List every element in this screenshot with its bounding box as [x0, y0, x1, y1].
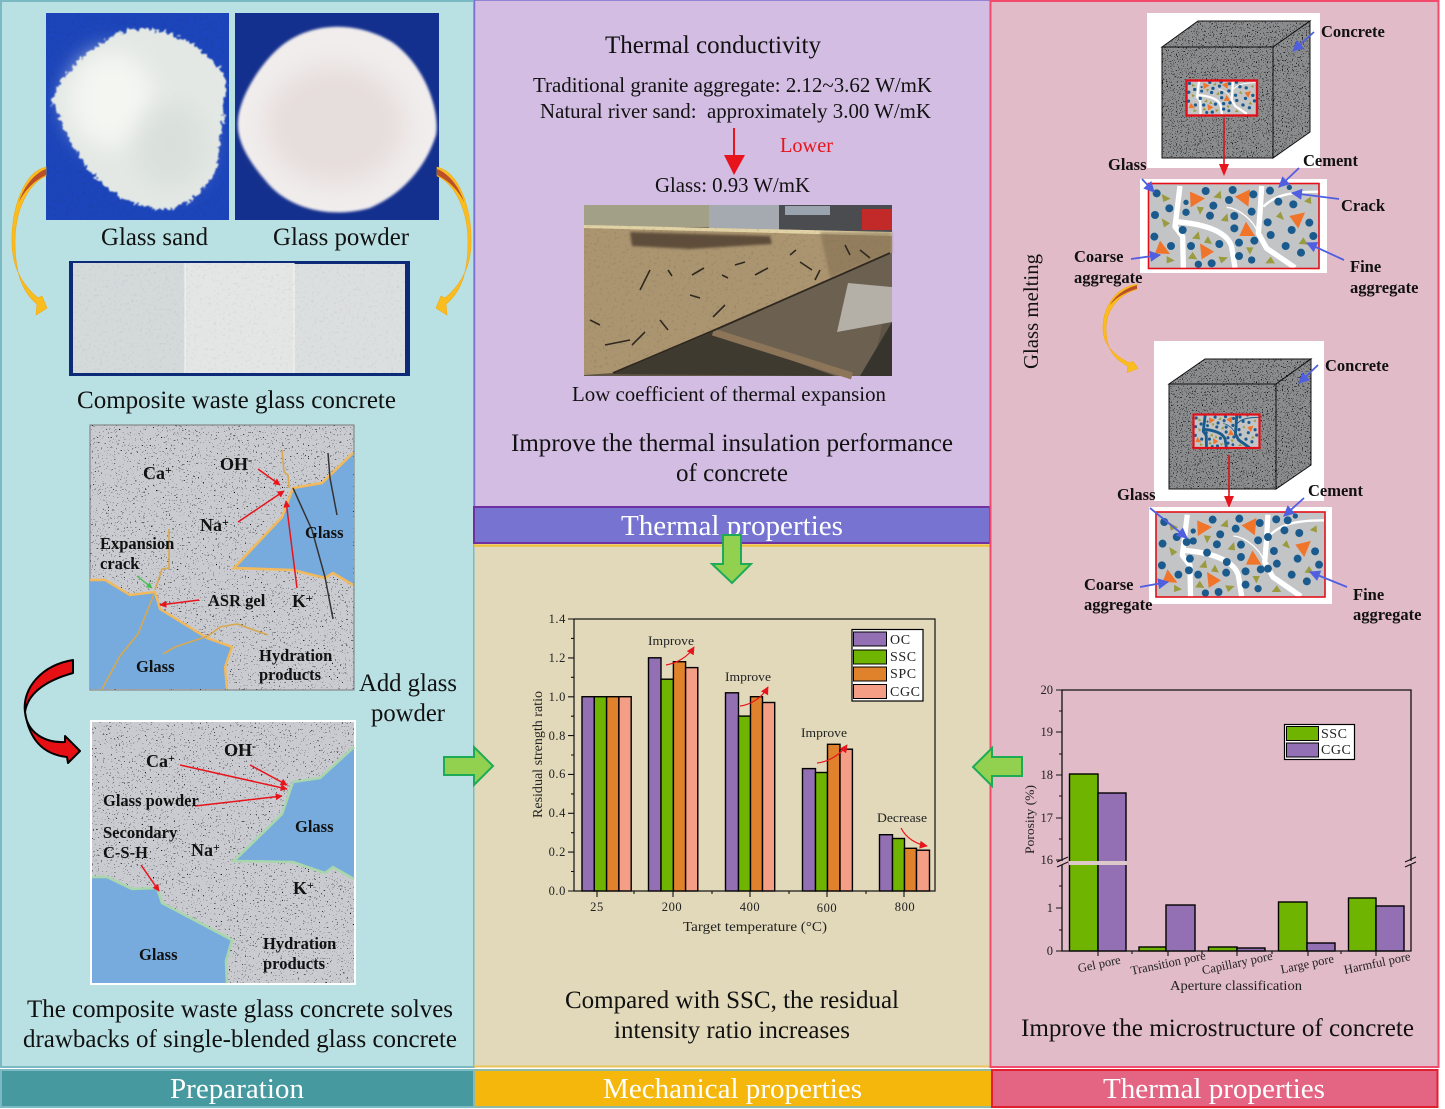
- label: glass sand: Glass sand: [101, 224, 208, 251]
- text: conductivity values: [533, 73, 932, 123]
- bars 600 C: [802, 744, 852, 891]
- arrow: red curved: [25, 660, 80, 763]
- annotations: Improve: [648, 634, 694, 648]
- category labels: Transition pore: [1129, 948, 1207, 978]
- y axis ticks: 1.0: [549, 690, 566, 704]
- diagram labels: OH: [224, 740, 252, 760]
- diagram labels: -: [252, 739, 256, 753]
- caption: low coefficient: Low coefficient of thermal expansion: [572, 382, 886, 406]
- diagram: detail before melting: [1140, 179, 1327, 273]
- text: glass conductivity: Glass: 0.93 W/mK: [655, 173, 810, 197]
- legend: SPC: [890, 667, 917, 682]
- diagram: concrete cube before melting: [1147, 13, 1320, 168]
- chart: residual strength ratio: [531, 612, 935, 935]
- y axis ticks: 17: [1040, 811, 1053, 825]
- footer: preparation: Preparation: [170, 1073, 305, 1105]
- diagram labels: +: [307, 878, 314, 892]
- labels: detail after melting: Glass: [1117, 485, 1156, 504]
- footer: mechanical properties: [474, 1070, 992, 1107]
- label: composite waste glass concrete: Composite waste glass concrete: [77, 387, 396, 414]
- diagram labels: K: [293, 878, 307, 898]
- diagram labels: Glass: [295, 817, 334, 836]
- category labels: [1076, 948, 1412, 978]
- diagram labels: OH: [220, 454, 248, 474]
- labels: detail before melting: Concrete: [1321, 22, 1385, 41]
- bars 800 C: [880, 835, 930, 891]
- conclusion: microstructure: Improve the microstructure of concrete: [1021, 1015, 1414, 1042]
- annotations: [648, 634, 927, 846]
- annotations: Decrease: [877, 811, 927, 825]
- ion arrows: [160, 469, 297, 605]
- text: conductivity values: Traditional granite aggregate: 2.12~3.62 W/mK: [533, 73, 932, 97]
- diagram labels: +: [165, 463, 172, 477]
- category labels: Harmful pore: [1343, 949, 1412, 977]
- x axis ticks: 800: [895, 900, 915, 914]
- diagram labels: +: [222, 515, 229, 529]
- conclusion: thermal insulation: Improve the thermal insulation performance: [511, 430, 953, 457]
- arrow: preparation to mechanical: [444, 747, 493, 785]
- diagram labels: Glass: [305, 523, 344, 542]
- diagram labels: Ca: [143, 463, 165, 483]
- footer: mechanical properties: Mechanical properties: [603, 1073, 862, 1105]
- diagram labels: [100, 453, 344, 684]
- photo: glass powder: [235, 13, 439, 220]
- legend: CGC: [1321, 743, 1351, 758]
- diagram labels: Glass: [139, 945, 178, 964]
- crack pointer: [137, 576, 152, 588]
- labels: detail before melting: Cement: [1303, 151, 1358, 170]
- diagram labels: [103, 739, 336, 973]
- conclusion: mechanical: Compared with SSC, the residual: [565, 987, 899, 1014]
- labels: detail after melting: Coarse: [1084, 575, 1133, 594]
- arrow: microstructure to mechanical: [973, 748, 1022, 786]
- arrow: thermal down to mechanical: [712, 535, 751, 583]
- diagram labels: products: [259, 665, 322, 684]
- diagram labels: +: [306, 591, 313, 605]
- diagram labels: Ca: [146, 751, 168, 771]
- legend: [852, 630, 923, 701]
- legend: CGC: [890, 685, 921, 700]
- diagram labels: Na: [191, 840, 213, 860]
- label: glass powder: Glass powder: [273, 224, 410, 251]
- bars: large pore: [1278, 902, 1335, 951]
- conclusion: mechanical: [565, 987, 899, 1044]
- label: add glass powder: [359, 670, 457, 727]
- category labels: Gel pore: [1076, 953, 1122, 975]
- heading: thermal conductivity: Thermal conductivity: [605, 32, 821, 59]
- x axis ticks: 200: [662, 900, 682, 914]
- chart: porosity by aperture class: [1022, 683, 1416, 994]
- conclusion: mechanical: intensity ratio increases: [614, 1017, 850, 1044]
- y axis ticks: 0: [1047, 944, 1053, 958]
- labels: detail before melting: Coarse: [1074, 247, 1123, 266]
- diagram labels: +: [213, 840, 220, 854]
- labels: detail before melting: [1074, 22, 1418, 297]
- label: add glass powder: Add glass: [359, 670, 457, 697]
- diagram: detail after melting: [1149, 507, 1332, 604]
- labels: detail after melting: Concrete: [1325, 356, 1389, 375]
- label: add glass powder: powder: [371, 700, 446, 727]
- diagram labels: C-S-H: [103, 843, 148, 862]
- bars: harmful pore: [1348, 898, 1404, 951]
- labels: detail before melting: aggregate: [1350, 278, 1418, 297]
- labels: detail before melting: Fine: [1350, 257, 1381, 276]
- labels: detail after melting: [1084, 356, 1421, 624]
- photo: damaged concrete beam: [584, 205, 892, 376]
- legend: SSC: [890, 650, 917, 665]
- panel: preparation: [1, 1, 474, 1067]
- y axis ticks: 20: [1040, 683, 1053, 697]
- footer: thermal properties: [992, 1070, 1438, 1107]
- labels: detail before melting: aggregate: [1074, 268, 1142, 287]
- diagram labels: Glass powder: [103, 791, 199, 810]
- y axis ticks: 1.4: [549, 612, 566, 626]
- conclusion: preparation: The composite waste glass concrete solves: [27, 996, 453, 1023]
- conclusion: preparation: drawbacks of single-blended glass concrete: [23, 1026, 457, 1053]
- bars: transition pore: [1139, 905, 1195, 951]
- labels: detail after melting: aggregate: [1084, 595, 1152, 614]
- diagram: secondary C-S-H with glass powder: [90, 720, 356, 985]
- y axis ticks: 0.8: [549, 729, 566, 743]
- arrow: cube to detail: [1224, 455, 1234, 508]
- conclusion: thermal insulation: [511, 430, 953, 487]
- annotations: Improve: [725, 670, 771, 684]
- annotations: Improve: [801, 726, 847, 740]
- label: lower: Lower: [780, 133, 833, 157]
- x axis ticks: 25: [590, 900, 604, 914]
- y axis ticks: 16: [1040, 853, 1053, 867]
- panel: mechanical properties: [474, 545, 990, 1067]
- diagram labels: Hydration: [263, 934, 336, 953]
- conclusion: preparation: [23, 996, 457, 1053]
- label: glass melting: Glass melting: [1019, 254, 1043, 369]
- panel: microstructure: [990, 1, 1438, 1067]
- arrow: cube to detail: [1219, 118, 1229, 176]
- band: thermal properties: [474, 507, 990, 543]
- text: conductivity values: Natural river sand: approximately 3.00 W/mK: [540, 99, 931, 123]
- diagram labels: ASR gel: [208, 591, 266, 610]
- diagram labels: K: [292, 591, 306, 611]
- diagram labels: crack: [100, 554, 140, 573]
- x axis title: Aperture classification: [1170, 979, 1302, 994]
- y axis ticks: 0.4: [549, 806, 566, 820]
- labels: detail before melting: Glass: [1108, 155, 1147, 174]
- photo: glass sand: [46, 13, 229, 220]
- labels: detail after melting: Fine: [1353, 585, 1384, 604]
- footer: preparation: [1, 1070, 474, 1107]
- diagram labels: Hydration: [259, 646, 332, 665]
- ion arrows: [141, 765, 287, 891]
- x axis ticks: [590, 900, 915, 915]
- x axis ticks: 600: [817, 901, 837, 915]
- y axis ticks: 19: [1040, 725, 1053, 739]
- diagram: ASR reaction with expansion cracks: [90, 425, 354, 690]
- diagram labels: products: [263, 954, 326, 973]
- legend: [1284, 724, 1354, 760]
- y axis title: Porosity (%): [1022, 785, 1037, 854]
- legend: OC: [890, 633, 911, 648]
- diagram labels: Glass: [136, 657, 175, 676]
- x axis ticks: 400: [740, 900, 760, 914]
- y axis ticks: 0.0: [549, 884, 566, 898]
- diagram labels: Expansion: [100, 534, 174, 553]
- legend: SSC: [1321, 727, 1347, 742]
- band: thermal properties: Thermal properties: [621, 510, 843, 542]
- diagram labels: +: [168, 751, 175, 765]
- diagram labels: Na: [200, 515, 222, 535]
- bars 200 C: [648, 658, 698, 891]
- category labels: Large pore: [1279, 952, 1336, 977]
- axis break band: [1069, 861, 1127, 865]
- labels: detail before melting: Crack: [1341, 196, 1386, 215]
- bars 400 C: [726, 693, 775, 891]
- y axis ticks: 0.6: [549, 767, 566, 781]
- y axis ticks: 1.2: [549, 651, 566, 665]
- labels: detail after melting: Cement: [1308, 481, 1363, 500]
- labels: detail after melting: aggregate: [1353, 605, 1421, 624]
- footer: thermal properties: Thermal properties: [1103, 1073, 1325, 1105]
- x axis title: Target temperature (°C): [683, 920, 827, 935]
- diagram: concrete cube after melting: [1154, 341, 1324, 501]
- y axis ticks: 1: [1047, 901, 1053, 915]
- bars 25 C: [582, 697, 631, 891]
- y axis title: Residual strength ratio: [531, 691, 546, 818]
- diagram labels: -: [248, 453, 252, 467]
- y axis ticks: [549, 612, 566, 898]
- photo: composite waste glass concrete slab: [69, 261, 410, 376]
- diagram labels: Secondary: [103, 823, 178, 842]
- arrow: glass powder to concrete: [436, 167, 471, 315]
- arrow: glass sand to concrete: [12, 167, 47, 315]
- arrow: lower: [724, 128, 745, 175]
- bars: capillary pore: [1208, 947, 1265, 951]
- y axis ticks: 0.2: [549, 845, 566, 859]
- arrow: melting: [1103, 284, 1138, 373]
- conclusion: thermal insulation: of concrete: [676, 460, 788, 487]
- y axis ticks: 18: [1040, 768, 1053, 782]
- y axis ticks: [1040, 683, 1053, 958]
- bars: gel pore: [1070, 774, 1126, 951]
- panel: thermal conductivity: [474, 0, 990, 507]
- category labels: Capillary pore: [1201, 949, 1274, 977]
